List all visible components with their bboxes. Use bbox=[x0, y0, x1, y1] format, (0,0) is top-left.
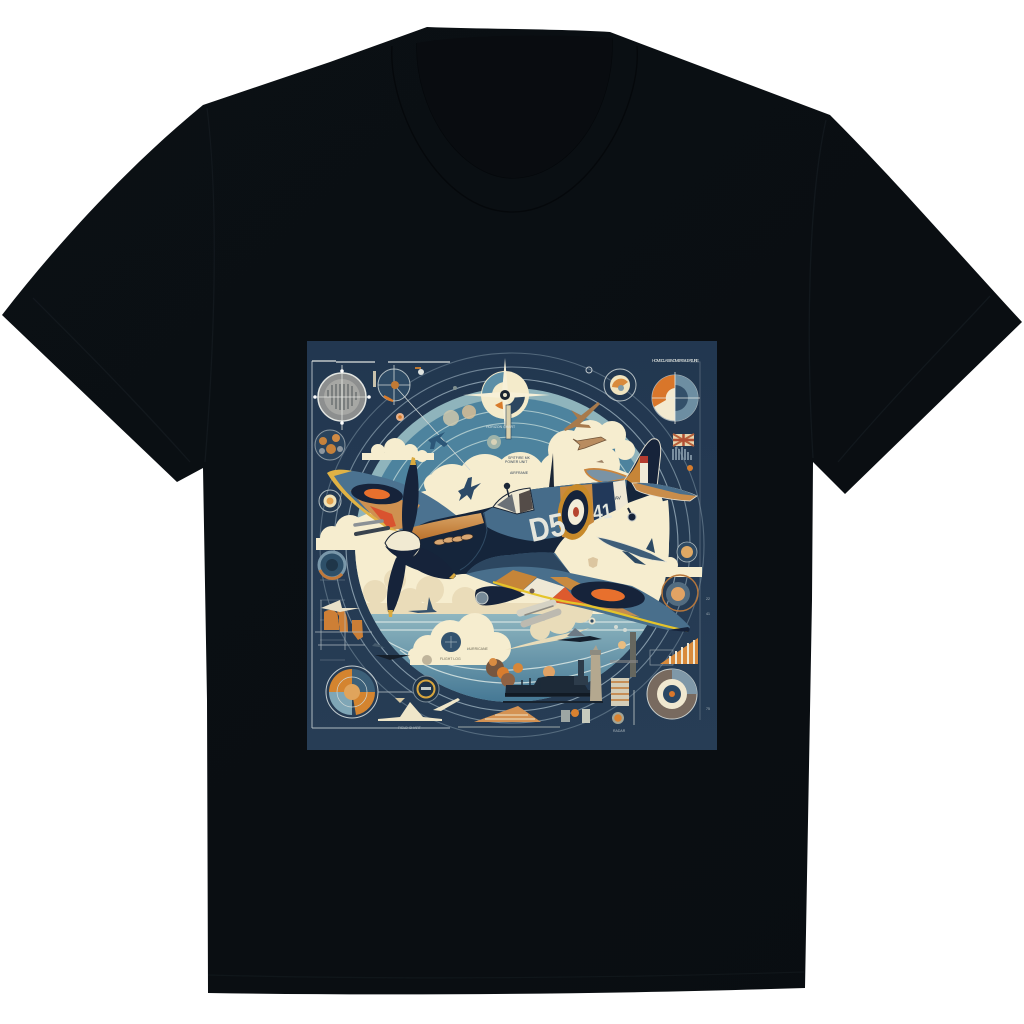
info labels in globe: POWER UNIT bbox=[505, 460, 528, 464]
right lower cloud bbox=[666, 557, 702, 577]
horizon sea bbox=[371, 614, 647, 702]
fuselage number: 41 bbox=[592, 500, 614, 525]
small tan plane bbox=[596, 460, 604, 463]
ring lines bbox=[392, 410, 627, 491]
striped column bbox=[611, 678, 634, 725]
upper blade tip bbox=[410, 457, 416, 465]
sea lines bbox=[360, 622, 660, 683]
radio mast bbox=[549, 453, 554, 487]
left lower cloud bbox=[316, 515, 358, 550]
near wing bbox=[466, 552, 690, 632]
cloud caption bbox=[440, 647, 488, 661]
caption on ring: HORIZON CHART bbox=[486, 425, 516, 429]
far wing bbox=[327, 470, 462, 532]
upper right cloud bbox=[541, 420, 635, 470]
dark jet at bottom bbox=[557, 618, 602, 642]
tail fin bbox=[622, 439, 661, 487]
lower left orange bars chart bbox=[315, 600, 372, 650]
top center compass star bbox=[463, 358, 550, 439]
big center cloud bbox=[424, 452, 542, 491]
fuselage cream band bbox=[613, 480, 628, 512]
top right pie dial bbox=[652, 372, 700, 424]
small bottom gauges bbox=[561, 709, 626, 733]
central sky globe bbox=[340, 388, 680, 709]
right tiny scale text bbox=[706, 597, 710, 711]
orange map dial bbox=[315, 430, 345, 460]
top right tiny caption: HOME CLASSNOMERSY LEATURE bbox=[652, 358, 699, 363]
wing radiator bbox=[475, 586, 525, 605]
info labels in globe: SPITFIRE MK bbox=[508, 456, 531, 460]
right mid orange dial bbox=[662, 575, 698, 611]
small jet at right bbox=[597, 537, 667, 565]
cloud caption: HURRICANE bbox=[467, 647, 488, 651]
orbit arcs bbox=[320, 353, 704, 737]
ring badges on band bbox=[443, 405, 501, 449]
union flag bbox=[673, 434, 694, 446]
fuselage code letters: D5 bbox=[526, 506, 569, 549]
fuselage orange band bbox=[560, 484, 594, 538]
propeller bbox=[385, 457, 456, 617]
tailplane near bbox=[632, 483, 697, 501]
lower left target bbox=[326, 666, 412, 718]
blueprint frame bbox=[312, 361, 700, 728]
small compass dial bbox=[378, 365, 470, 470]
bottom caption: FIELD CHART bbox=[398, 726, 422, 730]
right tiny scale text: 22 bbox=[706, 597, 710, 601]
fuselage roundel bbox=[554, 482, 596, 542]
info labels in globe bbox=[505, 456, 530, 474]
far wing roundel bbox=[350, 481, 404, 507]
serial text: AV bbox=[614, 495, 622, 502]
upper left cloud bbox=[362, 438, 434, 462]
lighthouse tower bbox=[590, 625, 638, 701]
tan emblem bbox=[588, 557, 598, 568]
top right target dial bbox=[586, 367, 636, 401]
far wing cannons bbox=[355, 521, 388, 534]
info labels in globe: AIRFRAME bbox=[510, 471, 529, 475]
mid tan plane bbox=[573, 437, 606, 450]
cream swept plane silhouettes bbox=[372, 643, 460, 721]
right tiny scale text: 41 bbox=[706, 612, 710, 616]
spinner bbox=[385, 531, 421, 558]
lower cream shading bbox=[360, 569, 560, 614]
globe base rings bbox=[355, 388, 669, 702]
lower mid badge bbox=[413, 676, 439, 702]
cream silhouette plane bbox=[458, 477, 481, 501]
radiator intake bbox=[476, 592, 488, 604]
far tailplane bbox=[585, 469, 630, 483]
near wing roundel bbox=[570, 578, 646, 612]
smoke plumes bbox=[486, 658, 555, 687]
bottom triangle chart bbox=[458, 706, 560, 727]
warship bbox=[503, 660, 603, 703]
small left silhouette plane bbox=[428, 432, 448, 449]
right blade bbox=[404, 546, 456, 579]
upper tan plane bbox=[564, 402, 600, 431]
right tiny scale text: 75 bbox=[706, 707, 710, 711]
mid right cream sky bbox=[662, 500, 670, 544]
right upper dial bbox=[677, 542, 697, 562]
near wing cannons bbox=[520, 603, 558, 624]
bottom cloud bbox=[408, 613, 511, 665]
neck interior bbox=[417, 35, 612, 178]
fuselage bbox=[395, 480, 650, 575]
dial on bottom cloud bbox=[422, 632, 461, 665]
small bottom gauges: RADAR bbox=[613, 729, 626, 733]
flag bar chart bbox=[673, 447, 691, 460]
cream sky bbox=[340, 470, 680, 615]
small plane on horizon bbox=[408, 597, 437, 613]
top left dial bbox=[313, 365, 371, 430]
lower blade bbox=[387, 558, 406, 612]
upper blade bbox=[402, 462, 419, 532]
tail wheel bbox=[628, 508, 636, 521]
spitfire aircraft bbox=[327, 439, 697, 632]
bottom right cloud bbox=[507, 604, 593, 650]
lamp dial bbox=[319, 490, 341, 512]
lower blade tip bbox=[388, 610, 393, 617]
exhaust stubs bbox=[434, 533, 473, 546]
fuselage dark panel bbox=[592, 482, 616, 521]
printed design panel bbox=[307, 341, 717, 750]
engine cowling bbox=[412, 513, 484, 541]
upper left ring gauge bbox=[319, 552, 345, 578]
orange hex marker bbox=[687, 465, 693, 471]
cloud caption: FLIGHT LOG bbox=[440, 657, 461, 661]
panel background bbox=[307, 341, 717, 750]
right bar chart bbox=[650, 638, 698, 665]
canopy bbox=[493, 483, 534, 514]
small gauge icons bbox=[373, 368, 457, 421]
lower right target dial bbox=[647, 669, 697, 719]
cowl panel line bbox=[460, 513, 487, 570]
fuselage blue upper bbox=[483, 480, 627, 541]
clouds bbox=[316, 420, 702, 665]
